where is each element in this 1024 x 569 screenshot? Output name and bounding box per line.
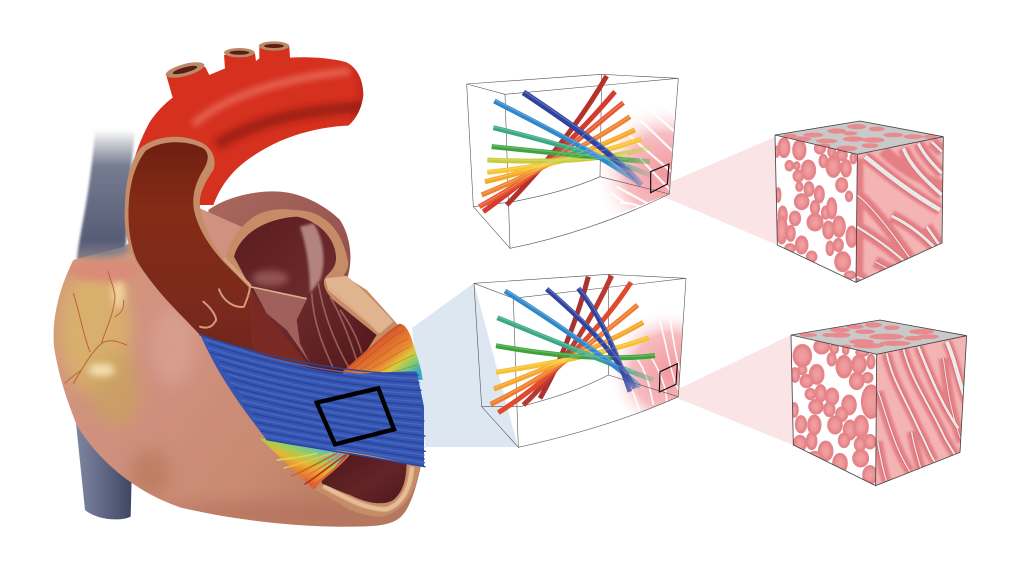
right wall highlight [325,276,393,333]
lower tissue cube [791,320,967,486]
upper selection rectangle [651,164,669,193]
projection: pink wedge to upper cube [652,137,777,245]
wireframe box [467,74,678,248]
left face cross-section cells [792,341,876,484]
pink fading tissue section [616,317,683,414]
lower chamber rim cream [323,467,412,509]
lower selection rectangle [659,364,677,392]
top face [791,320,967,354]
aortic arch [125,41,367,205]
upper tissue cube [775,121,943,282]
upper fibre volume [467,70,680,248]
cut wall tan rim [125,137,421,517]
selection rectangle on heart [317,388,394,444]
heart illustration [40,41,440,540]
upper rainbow fibres [343,324,423,380]
wireframe box [474,274,686,447]
papillary streak [300,223,323,293]
lower rainbow fibres [260,438,348,489]
lower fibre volume [474,274,690,447]
right face fibres [856,137,943,282]
blue fibre band [200,334,425,467]
fat patch [60,267,130,393]
cube edges [791,320,967,486]
coronary vessels [65,272,127,383]
superior vena cava [77,130,135,260]
inferior vena cava [75,413,132,519]
projection: blue wedge from heart to lower volume [412,283,518,447]
left face cross-section cells [775,135,857,282]
valve leaflets [200,287,250,328]
lower chamber [322,448,407,503]
tube highlights [480,91,642,206]
cube edges [775,121,943,282]
papillary tissue [253,288,310,363]
left ventricle chamber [234,217,377,377]
large cell at edge [861,384,876,419]
infographic: heart fibre architecture [54,41,968,527]
right face fibres [876,336,967,486]
pink fading tissue section [604,113,675,213]
projection: pink wedge to lower cube [672,335,793,445]
aorta interior [128,142,253,363]
ventricular shading [250,288,310,367]
fibre tubes [491,276,656,413]
aorta shadow [217,107,367,145]
vessel openings [164,59,206,81]
heart outer body [54,208,421,527]
left atrium dome behind [208,191,350,303]
aorta highlight [193,71,350,125]
fibre tubes [479,76,650,212]
top face [775,121,943,154]
tube highlights [491,287,656,403]
septal wall [224,258,251,286]
